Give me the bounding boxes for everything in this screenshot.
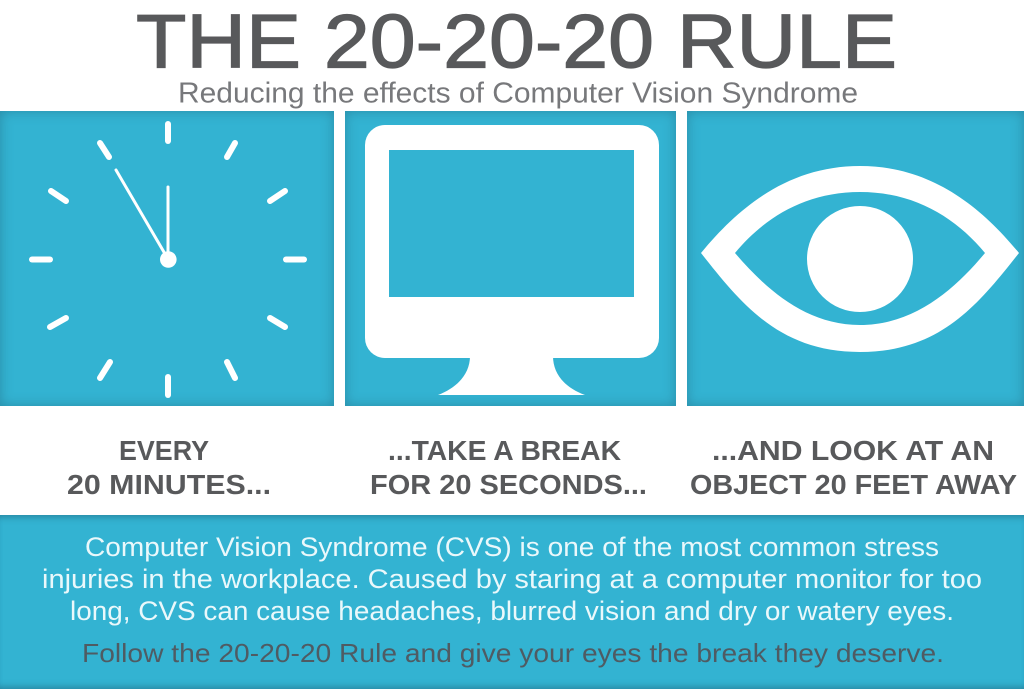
label: take a break: [370, 435, 647, 500]
label: every 20 minutes: [67, 435, 271, 500]
icon: computer monitor: [365, 125, 659, 395]
monitor stand: [438, 356, 585, 395]
label: look at an object: OBJECT 20 FEET AWAY: [690, 469, 1017, 500]
body text: long, CVS can cause headaches, blurred vision and dry or watery eyes.: [70, 596, 954, 626]
body text: [42, 532, 982, 626]
label: look at an object: ...AND LOOK AT AN: [712, 435, 994, 466]
title: THE 20-20-20 RULE: [136, 0, 897, 84]
call to action: Follow the 20-20-20 Rule and give your eyes the break they deserve.: [82, 638, 944, 668]
body text: injuries in the workplace. Caused by staring at a computer monitor for too: [42, 564, 982, 594]
eye pupil: [807, 206, 913, 312]
panel: clock background: [0, 111, 334, 406]
icon: clock: [32, 124, 304, 395]
icon: eye: [701, 166, 1019, 352]
label: take a break: FOR 20 SECONDS...: [370, 469, 647, 500]
label: every 20 minutes: 20 MINUTES...: [67, 469, 271, 500]
panel: eye background: [687, 111, 1024, 406]
label: look at an object: [690, 435, 1017, 500]
label: take a break: ...TAKE A BREAK: [388, 435, 621, 466]
clock hands: [116, 170, 168, 259]
monitor screen: [389, 150, 634, 297]
body text: Computer Vision Syndrome (CVS) is one of the most common stress: [85, 532, 939, 562]
label: every 20 minutes: EVERY: [119, 435, 209, 466]
clock hour ticks: [32, 124, 304, 395]
panel: monitor background: [345, 111, 676, 406]
panel: explanation background: [0, 515, 1024, 689]
clock centre: [160, 251, 177, 268]
monitor body: [365, 125, 659, 358]
eye outline: [701, 166, 1019, 352]
subtitle: Reducing the effects of Computer Vision Syndrome: [178, 78, 858, 110]
